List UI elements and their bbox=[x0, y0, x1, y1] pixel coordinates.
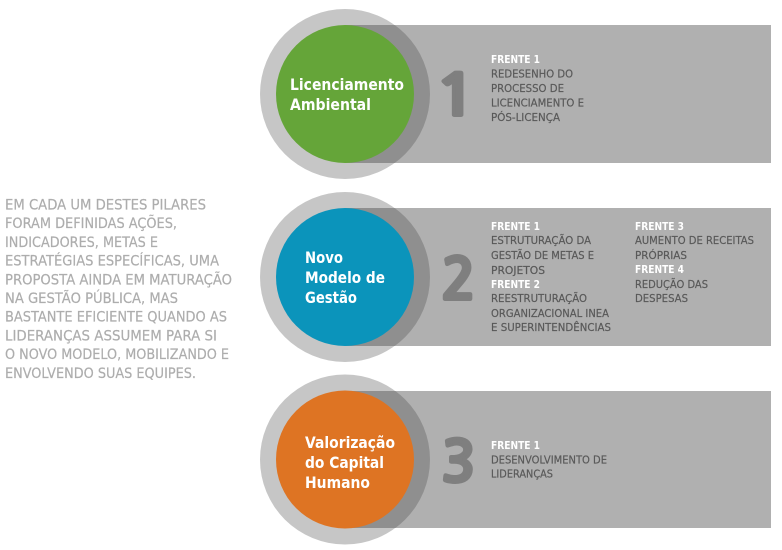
text block: introduction: LIDERANÇAS ASSUMEM PARA SI bbox=[5, 328, 217, 344]
outer ring 1 bbox=[260, 9, 430, 179]
text block: introduction: NA GESTÃO PÚBLICA, MAS bbox=[5, 289, 178, 307]
green circle bbox=[276, 25, 414, 163]
outer ring 3 bbox=[260, 374, 430, 544]
heading: Valorização do Capital Humano: Valorização bbox=[305, 433, 395, 452]
outer ring 2 bbox=[260, 192, 430, 362]
ring overlap 2 bbox=[347, 208, 430, 346]
grey bar 3 bbox=[345, 391, 771, 528]
text block: introduction: ESTRATÉGIAS ESPECÍFICAS, UMA bbox=[5, 253, 219, 270]
text: frentes 1 e 2: GESTÃO DE METAS E bbox=[491, 249, 594, 262]
text: frentes 3 e 4: FRENTE 4 bbox=[635, 264, 684, 276]
heading: Novo Modelo de Gestão: Modelo de bbox=[305, 268, 385, 287]
text block: introduction bbox=[5, 198, 232, 382]
text: frentes 1 e 2: ORGANIZACIONAL INEA bbox=[491, 308, 610, 320]
text block: introduction: INDICADORES, METAS E bbox=[5, 235, 158, 251]
grey bar 1 bbox=[345, 25, 771, 163]
heading: Valorização do Capital Humano bbox=[305, 433, 395, 492]
text: frente 1: LICENCIAMENTO E bbox=[491, 98, 584, 110]
text: frentes 1 e 2: ESTRUTURAÇÃO DA bbox=[491, 234, 592, 247]
text: frentes 3 e 4: REDUÇÃO DAS bbox=[635, 278, 708, 291]
text: frentes 3 e 4: PRÓPRIAS bbox=[635, 249, 687, 262]
text block: introduction: PROPOSTA AINDA EM MATURAÇÃO bbox=[5, 271, 232, 288]
text: frente 1: FRENTE 1 bbox=[491, 440, 540, 452]
heading: Licenciamento Ambiental: Licenciamento bbox=[290, 75, 404, 94]
text: frentes 1 e 2 bbox=[491, 221, 611, 334]
heading: Licenciamento Ambiental bbox=[290, 75, 404, 114]
text: frentes 3 e 4: AUMENTO DE RECEITAS bbox=[635, 235, 754, 247]
text block: introduction: FORAM DEFINIDAS AÇÕES, bbox=[5, 215, 177, 232]
text: frentes 1 e 2: REESTRUTURAÇÃO bbox=[491, 292, 587, 305]
number 2: 2 bbox=[441, 252, 476, 308]
text: frentes 1 e 2: E SUPERINTENDÊNCIAS bbox=[491, 321, 611, 334]
text block: introduction: BASTANTE EFICIENTE QUANDO AS bbox=[5, 310, 227, 326]
text block: introduction: ENVOLVENDO SUAS EQUIPES. bbox=[5, 366, 196, 382]
heading: Licenciamento Ambiental: Ambiental bbox=[290, 95, 371, 114]
text block: introduction: EM CADA UM DESTES PILARES bbox=[5, 198, 206, 214]
text: frente 1: LIDERANÇAS bbox=[491, 468, 553, 480]
panel: pillar 3 bbox=[260, 374, 771, 544]
heading: Valorização do Capital Humano: Humano bbox=[305, 473, 370, 492]
text: frentes 1 e 2: PROJETOS bbox=[491, 265, 545, 277]
text: frentes 3 e 4 bbox=[635, 221, 754, 305]
heading: Novo Modelo de Gestão: Gestão bbox=[305, 288, 357, 307]
text: frentes 1 e 2: FRENTE 2 bbox=[491, 279, 540, 291]
text: frente 1: REDESENHO DO bbox=[491, 68, 573, 80]
ring overlap 1 bbox=[347, 25, 430, 163]
grey bar 2 bbox=[345, 208, 771, 346]
panel: pillar 2 bbox=[260, 192, 771, 362]
text: frente 1: DESENVOLVIMENTO DE bbox=[491, 454, 607, 466]
text block: introduction: O NOVO MODELO, MOBILIZANDO E bbox=[5, 347, 229, 363]
text: frente 1: FRENTE 1 bbox=[491, 54, 540, 66]
text: frente 1: PROCESSO DE bbox=[491, 83, 564, 95]
text: frente 1: PÓS-LICENÇA bbox=[491, 111, 561, 124]
text: frente 1 bbox=[491, 440, 607, 480]
number 3: 3 bbox=[441, 435, 476, 491]
text: frentes 1 e 2: FRENTE 1 bbox=[491, 221, 540, 233]
number 1: 1 bbox=[434, 68, 478, 124]
orange circle bbox=[276, 390, 414, 528]
ring overlap 3 bbox=[354, 391, 430, 528]
panel: pillar 1 bbox=[260, 9, 771, 179]
heading: Valorização do Capital Humano: do Capital bbox=[305, 453, 384, 472]
heading: Novo Modelo de Gestão bbox=[305, 248, 385, 307]
blue circle bbox=[276, 208, 414, 346]
text: frentes 3 e 4: FRENTE 3 bbox=[635, 221, 684, 233]
heading: Novo Modelo de Gestão: Novo bbox=[305, 248, 343, 267]
text: frente 1 bbox=[491, 54, 584, 124]
text: frentes 3 e 4: DESPESAS bbox=[635, 293, 688, 305]
